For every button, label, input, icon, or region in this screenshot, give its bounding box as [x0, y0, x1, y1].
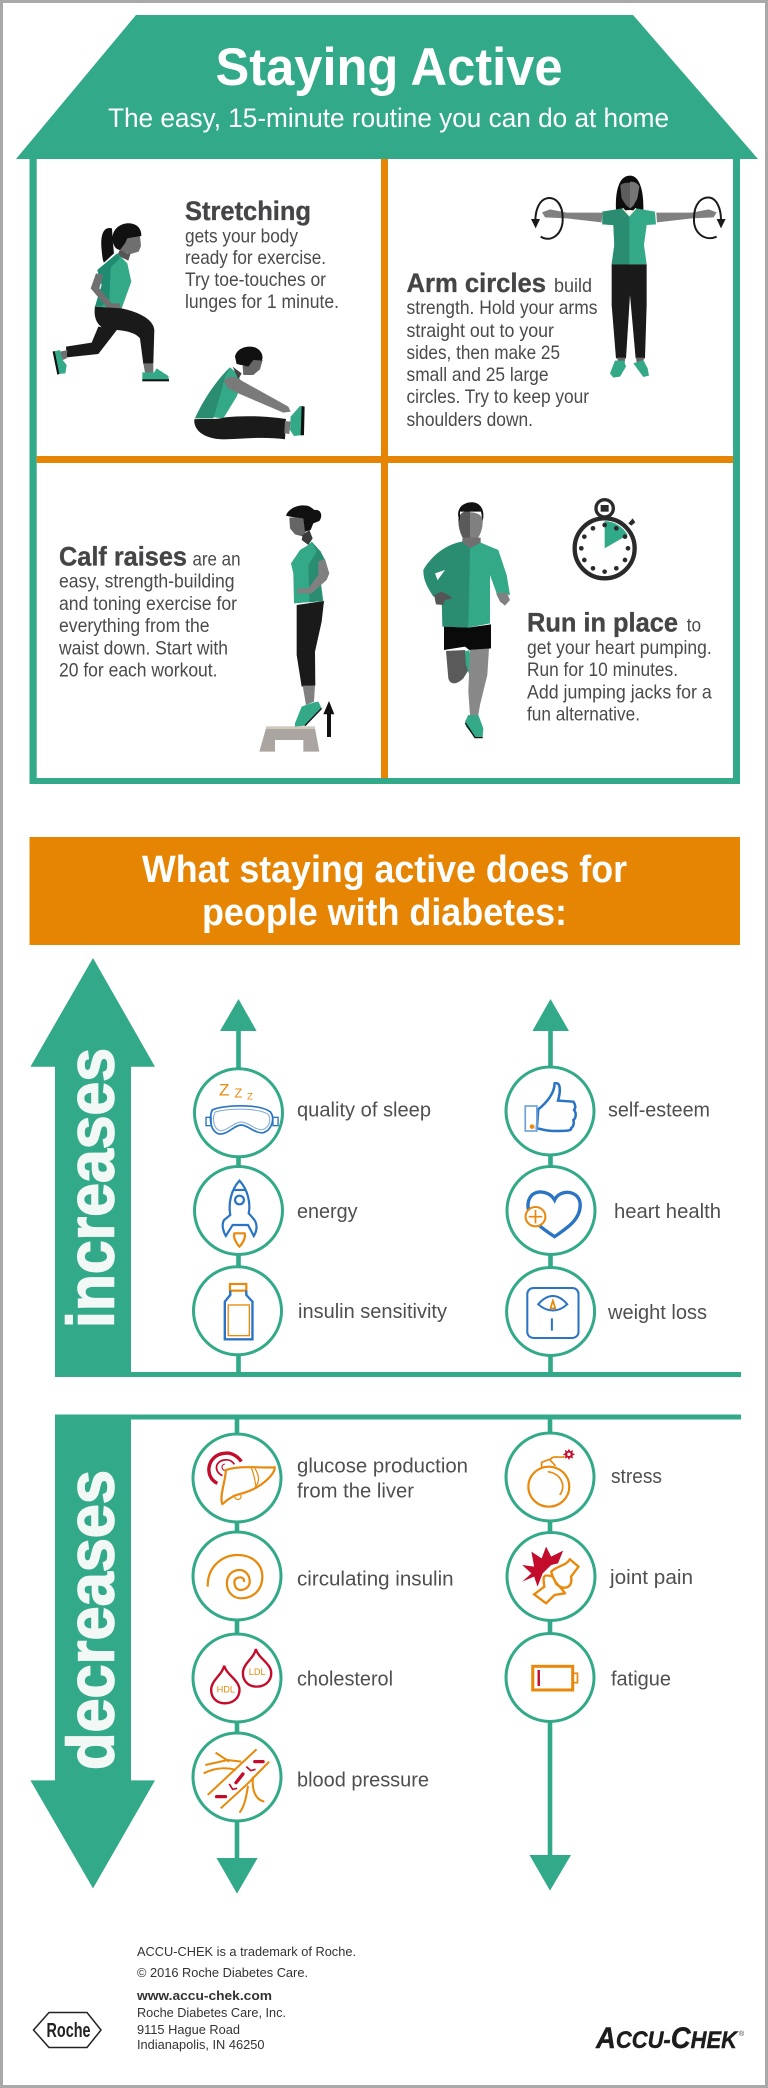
label: [297, 1455, 468, 1502]
title: Staying Active: [216, 38, 562, 97]
footer text: [136, 1944, 356, 2052]
label: glucose production: [297, 1455, 468, 1477]
banner: what staying active does: people with diabetes:: [202, 892, 567, 934]
big arrow: increases: increases: [54, 1048, 128, 1328]
header roof: [16, 15, 758, 159]
label: heart health: [614, 1201, 721, 1223]
icon: cholesterol drops: [211, 1649, 271, 1703]
text block: arm circles: build: [554, 275, 592, 297]
illustration: woman lunging: [53, 223, 169, 381]
text block: run in place: to: [687, 615, 701, 637]
text block: run in place: [527, 608, 712, 726]
text block: arm circles: [406, 268, 598, 431]
timeline: decreases left column: [193, 1417, 281, 1894]
text block: run in place: fun alternative.: [527, 704, 640, 726]
icon: left rotation arrow: [531, 198, 563, 239]
label: fatigue: [611, 1669, 671, 1691]
panel: house frame: [30, 159, 740, 784]
footer text: www.accu-chek.com: [136, 1988, 272, 2003]
illustration: man running in place: [423, 502, 510, 738]
illustration: woman doing arm circles: [531, 176, 726, 378]
text block: calf raises: Calf raises: [59, 542, 187, 572]
text block: arm circles: shoulders down.: [406, 409, 533, 431]
footer text: Roche Diabetes Care, Inc.: [137, 2005, 286, 2020]
text block: calf raises: everything from the: [59, 615, 210, 637]
icon: insulin bottle: [225, 1284, 252, 1339]
footer text: 9115 Hague Road: [137, 2022, 240, 2037]
text block: run in place: Run for 10 minutes.: [527, 659, 678, 681]
icon: right rotation arrow: [694, 198, 726, 238]
text block: stretching: gets your body: [185, 226, 298, 248]
label: stress: [611, 1466, 662, 1488]
banner: what staying active does: What staying active does for: [142, 849, 627, 891]
icon: heart with plus: [526, 1192, 580, 1237]
icon: thumbs up: [525, 1083, 576, 1131]
logo: Accu-Chek: ACCU-CHEK: [595, 2022, 739, 2055]
text block: stretching: [185, 196, 339, 313]
label: insulin sensitivity: [298, 1301, 447, 1323]
label: cholesterol: [297, 1669, 393, 1691]
label: quality of sleep: [297, 1100, 431, 1122]
icon: liver: [209, 1453, 275, 1504]
icon: bomb: [528, 1449, 575, 1507]
big arrow: decreases: decreases: [54, 1470, 128, 1770]
label: self-esteem: [608, 1100, 710, 1122]
icon: sleep mask: Z: [234, 1085, 242, 1100]
footer text: ACCU-CHEK is a trademark of Roche.: [137, 1944, 356, 1959]
timeline: decreases right column: [506, 1417, 595, 1891]
icon: cholesterol drops: LDL: [249, 1667, 266, 1677]
icon: stopwatch: [575, 500, 635, 578]
text block: stretching: lunges for 1 minute.: [185, 291, 339, 313]
timeline: increases right column: [506, 999, 595, 1374]
text block: calf raises: [58, 542, 240, 682]
icon: cholesterol drops: HDL: [217, 1685, 235, 1695]
icon: blood vessels: [204, 1749, 269, 1813]
icon: insulin spiral: [208, 1555, 262, 1598]
text block: arm circles: sides, then make 25: [406, 342, 560, 364]
text block: stretching: Try toe-touches or: [185, 269, 326, 291]
footer text: © 2016 Roche Diabetes Care.: [137, 1965, 308, 1980]
text block: calf raises: waist down. Start with: [58, 638, 228, 660]
text block: run in place: get your heart pumping.: [527, 637, 712, 659]
logo: Roche: [34, 2012, 101, 2048]
text block: stretching: Stretching: [185, 196, 311, 226]
label: circulating insulin: [297, 1569, 454, 1591]
text block: calf raises: easy, strength-building: [59, 571, 235, 593]
logo: Accu-Chek: ®: [739, 2030, 745, 2038]
text block: arm circles: circles. Try to keep your: [406, 386, 589, 408]
icon: rocket: [223, 1181, 257, 1247]
text block: calf raises: 20 for each workout.: [59, 660, 218, 682]
text block: calf raises: and toning exercise for: [59, 593, 237, 615]
illustration: woman doing calf raise: [259, 505, 334, 752]
text block: run in place: Run in place: [527, 608, 678, 638]
subtitle: The easy, 15-minute routine you can do at home: [108, 103, 669, 133]
label: energy: [297, 1201, 358, 1223]
label: from the liver: [297, 1480, 414, 1502]
icon: weight scale: [527, 1288, 578, 1338]
text block: arm circles: Arm circles: [406, 268, 546, 298]
illustration: man touching toes: [194, 347, 305, 439]
label: weight loss: [607, 1302, 707, 1324]
icon: joint pain: [522, 1547, 578, 1603]
icon: exercise step: [259, 726, 319, 752]
text block: arm circles: small and 25 large: [406, 364, 548, 386]
icon: low battery: [533, 1666, 577, 1690]
icon: sleep mask: Z: [219, 1081, 229, 1100]
text block: calf raises: are an: [192, 549, 240, 571]
label: joint pain: [609, 1567, 693, 1589]
text block: run in place: Add jumping jacks for a: [527, 682, 712, 704]
footer text: Indianapolis, IN 46250: [137, 2037, 264, 2052]
logo: Roche: Roche: [46, 2020, 90, 2042]
big arrow: decreases: [30, 1414, 741, 1888]
icon: sleep mask: Z: [247, 1091, 253, 1102]
arrow: up: [323, 701, 334, 737]
label: blood pressure: [297, 1770, 429, 1792]
text block: arm circles: strength. Hold your arms: [406, 297, 598, 319]
timeline: increases left column: [194, 999, 282, 1374]
big arrow: increases: [30, 958, 741, 1377]
text block: stretching: ready for exercise.: [185, 247, 326, 269]
banner: what staying active does: [30, 837, 740, 945]
icon: sleep mask: [206, 1081, 278, 1134]
text block: arm circles: straight out to your: [406, 320, 554, 342]
